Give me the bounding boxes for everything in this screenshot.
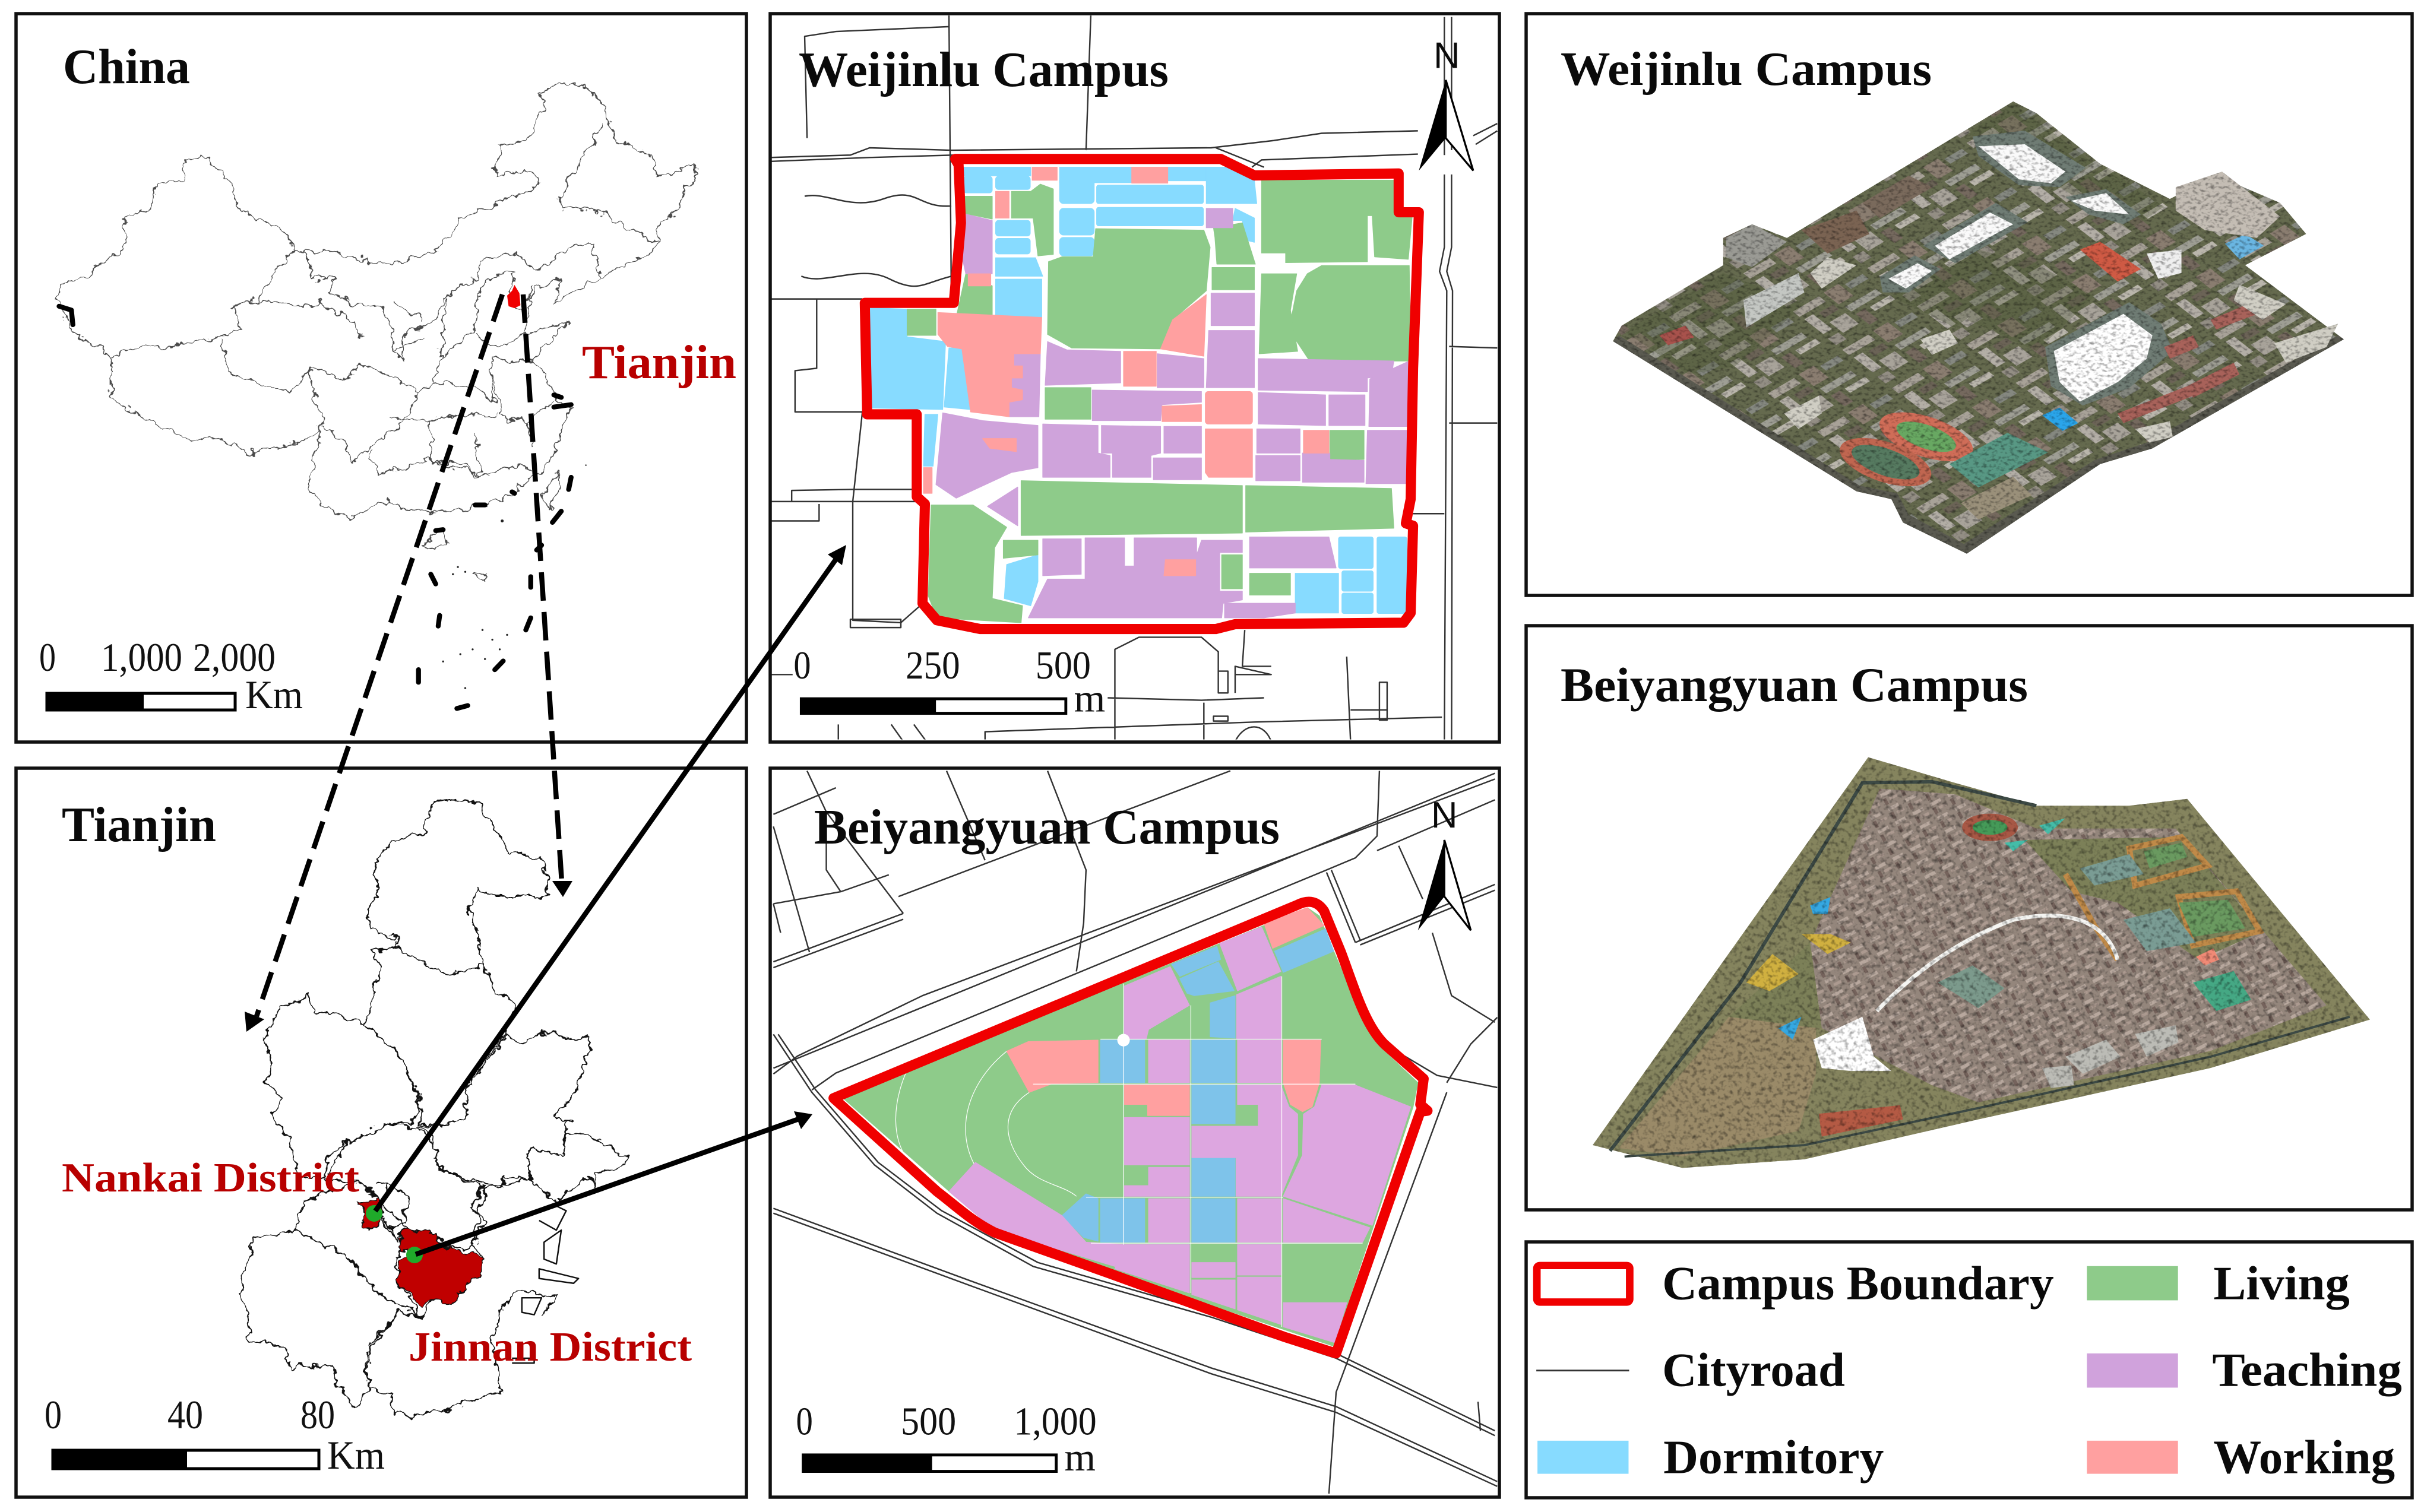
panel: legend: [1526, 1242, 2412, 1498]
scale bar: China: Km: [245, 672, 303, 717]
title: Beiyangyuan Campus aerial: Beiyangyuan Campus: [1561, 658, 2028, 712]
Jinnan district fill: [396, 1228, 485, 1307]
scale bar: Beiyangyuan: 1,000: [1014, 1400, 1097, 1444]
campus boundary: [865, 159, 1419, 629]
legend item: Dormitory: Dormitory: [1663, 1430, 1884, 1484]
legend item: Working: [2087, 1430, 2395, 1484]
title: China: China: [63, 39, 190, 94]
map: Tianjin location in red: [507, 285, 520, 308]
legend item: Teaching: [2087, 1343, 2402, 1396]
scale bar: Weijinlu: [793, 644, 1105, 720]
scale bar: Tianjin: 40: [167, 1392, 203, 1437]
north arrow: N: [1433, 35, 1460, 76]
legend item: Teaching: Teaching: [2212, 1343, 2402, 1396]
arrow: dashed from China to Tianjin west side: [245, 294, 502, 1032]
arrow: Nankai District to Weijinlu Campus: [375, 545, 846, 1211]
arrow: Jinnan District to Beiyangyuan Campus: [416, 1111, 812, 1254]
campus boundary: [834, 902, 1428, 1353]
teaching parcels: [949, 927, 1411, 1343]
scale bar: Tianjin: Km: [327, 1432, 385, 1478]
legend item: Living: [2087, 1256, 2350, 1310]
aerial image: Weijinlu Campus: [1613, 102, 2344, 554]
legend item: Working: Working: [2213, 1430, 2395, 1484]
scale bar: China: 0: [39, 635, 56, 680]
scale bar: Beiyangyuan: 500: [901, 1400, 956, 1444]
legend item: Dormitory: [1537, 1430, 1884, 1484]
working parcels: [923, 167, 1329, 576]
map: Tianjin districts: [241, 800, 628, 1416]
panel: Tianjin map: [16, 768, 746, 1497]
map: China outline and provinces: [56, 83, 699, 708]
scale bar: China: 1,000: [101, 635, 182, 680]
Nankai district fill: [357, 1201, 382, 1230]
scale bar: Weijinlu: 0: [793, 644, 811, 687]
legend item: Campus Boundary: Campus Boundary: [1662, 1256, 2054, 1310]
land-use parcels: [843, 908, 1418, 1346]
scale bar: Beiyangyuan: 0: [796, 1400, 813, 1444]
working parcels: [1007, 908, 1324, 1115]
scale bar: Weijinlu: 500: [1036, 644, 1091, 687]
panel: Weijinlu Campus aerial view: [1526, 14, 2412, 595]
panel: Beiyangyuan Campus aerial view: [1526, 626, 2412, 1210]
scale bar: China: 2,000: [193, 635, 276, 680]
living parcels: [907, 180, 1412, 623]
dormitory parcels: [869, 167, 1407, 613]
scale bar: Beiyangyuan: [796, 1400, 1097, 1479]
scale bar: Tianjin: 80: [300, 1392, 335, 1437]
white road gaps in parcels: [1033, 977, 1363, 1327]
scale bar: Weijinlu: m: [1074, 677, 1105, 720]
aerial image: Beiyangyuan Campus: [1593, 757, 2370, 1168]
city roads: [771, 14, 1497, 741]
legend item: Living: Living: [2213, 1256, 2350, 1310]
scale bar: China: [39, 635, 303, 717]
port outlines: [512, 1206, 578, 1363]
arrow: dashed from China to Tianjin east side: [523, 294, 572, 897]
scale bar: Weijinlu: 250: [906, 644, 960, 687]
title: Weijinlu Campus aerial: Weijinlu Campus: [1561, 43, 1932, 96]
scale bar: Tianjin: 0: [45, 1392, 62, 1437]
marker: Beiyangyuan campus location: [406, 1247, 423, 1263]
panel: Beiyangyuan Campus land-use map: [770, 768, 1499, 1497]
legend item: Cityroad: Cityroad: [1662, 1343, 1845, 1396]
living base: [843, 908, 1418, 1346]
title: Beiyangyuan Campus map: Beiyangyuan Campus: [814, 800, 1280, 855]
title: Weijinlu Campus map: Weijinlu Campus: [799, 42, 1169, 97]
label: Jinnan District: Jinnan District: [409, 1324, 692, 1370]
north arrow: [1418, 795, 1471, 930]
dormitory parcels: [1062, 929, 1334, 1242]
panel: China map: [16, 14, 746, 742]
city roads: [773, 771, 1497, 1494]
panel: Weijinlu Campus land-use map: [770, 14, 1499, 742]
teaching parcels: [936, 208, 1409, 618]
title: Tianjin: Tianjin: [62, 797, 216, 852]
label: Tianjin: Tianjin: [582, 337, 736, 389]
scale bar: Beiyangyuan: m: [1064, 1436, 1096, 1479]
marker: Weijinlu campus location: [366, 1205, 382, 1222]
north arrow: [1419, 35, 1473, 170]
north arrow: N: [1431, 795, 1458, 836]
land-use parcels: [869, 167, 1412, 623]
label: Nankai District: Nankai District: [62, 1155, 359, 1201]
scale bar: Tianjin: [45, 1392, 385, 1478]
